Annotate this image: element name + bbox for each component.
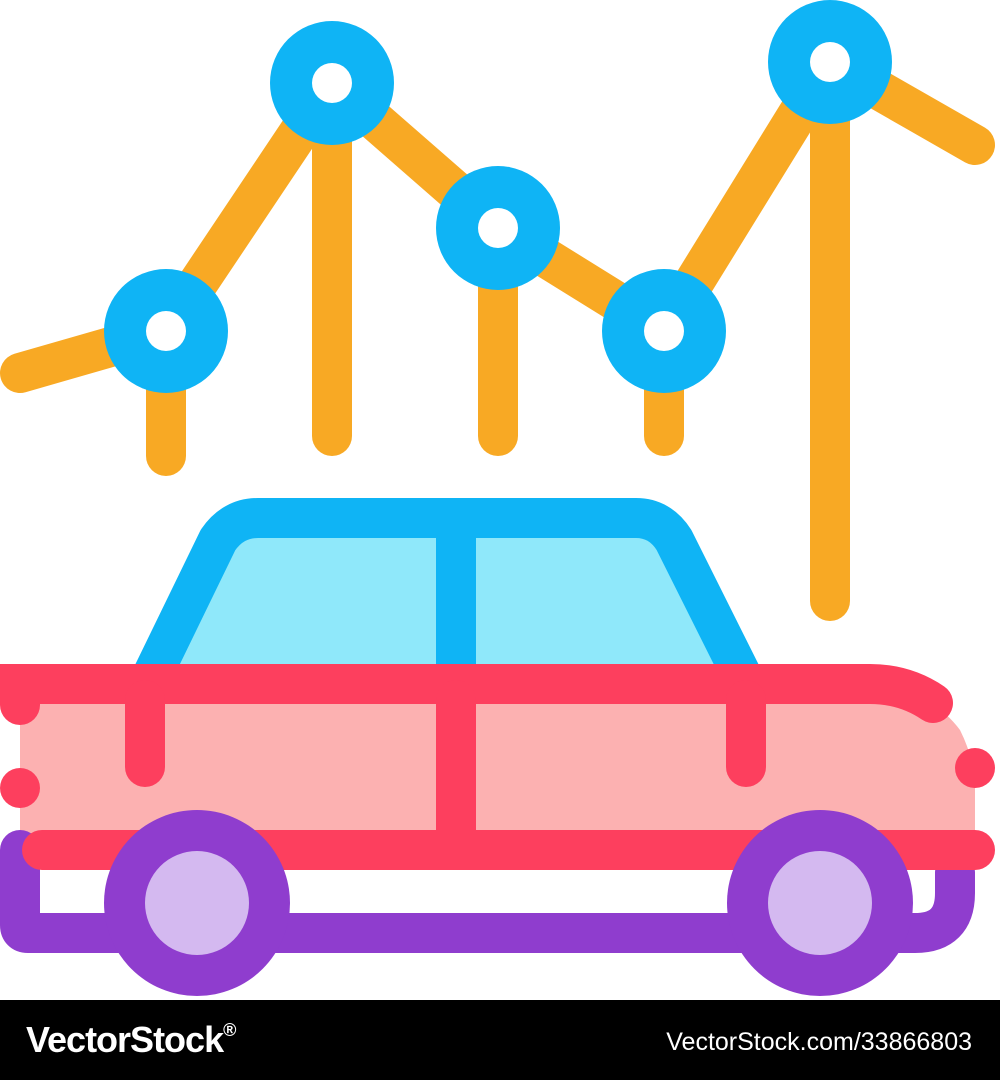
line chart	[20, 0, 975, 601]
footer url: VectorStock.com/33866803	[666, 1028, 972, 1056]
chart drop lines	[166, 62, 830, 601]
car roof	[148, 518, 746, 684]
footer logo text: VectorStock	[26, 1019, 223, 1060]
footer bar	[0, 1000, 1000, 1080]
chart polyline	[20, 62, 975, 373]
data point markers	[104, 0, 892, 393]
wheel right	[727, 810, 913, 996]
car	[0, 518, 995, 996]
sill	[20, 850, 955, 933]
footer logo text: ®	[223, 1020, 236, 1040]
wheel left	[104, 810, 290, 996]
car body	[20, 684, 975, 850]
body trim	[20, 684, 975, 850]
car windows	[150, 518, 748, 684]
